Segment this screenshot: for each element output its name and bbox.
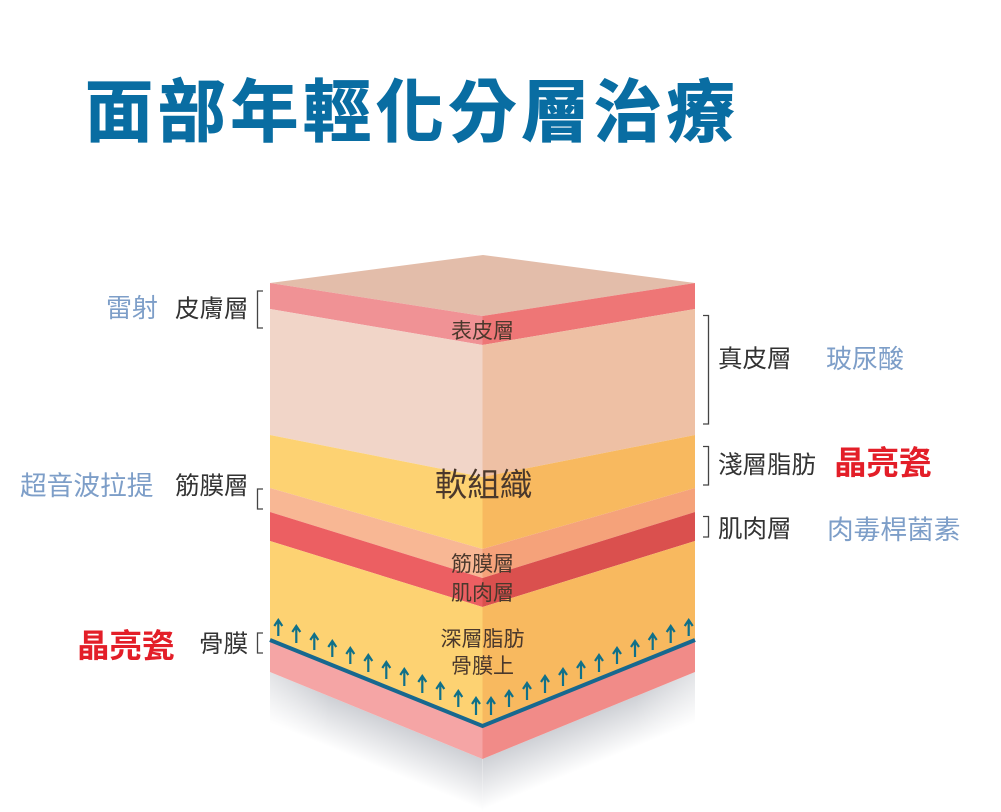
label: dermis: 真皮層 xyxy=(718,345,792,373)
muscle layer xyxy=(270,512,695,607)
left bracket: skin xyxy=(258,291,263,328)
dermis layer xyxy=(270,309,695,477)
center label: deep fat: 深層脂肪 xyxy=(440,628,524,651)
left bracket: periosteum xyxy=(258,633,263,653)
label: muscle layer: 肌肉層 xyxy=(718,515,792,543)
fascia layer xyxy=(270,488,695,578)
periosteum layer xyxy=(270,640,695,759)
layered tissue cube xyxy=(270,255,695,812)
label: ultrasound lift: 超音波拉提 xyxy=(20,471,153,501)
label: superficial fat: 淺層脂肪 xyxy=(718,451,816,479)
right bracket: dermis xyxy=(703,316,708,424)
deep fat layer xyxy=(270,541,695,727)
label: fascia layer: 筋膜層 xyxy=(175,472,248,500)
label: periosteum: 骨膜 xyxy=(199,630,248,658)
label: hyaluronic acid: 玻尿酸 xyxy=(826,344,904,374)
epidermis layer xyxy=(270,283,695,345)
top face xyxy=(270,255,695,316)
right bracket: superficial fat xyxy=(703,446,708,485)
upward arrows xyxy=(274,620,693,715)
periosteum line xyxy=(270,640,695,726)
label: botulinum toxin: 肉毒桿菌素 xyxy=(827,515,960,545)
label: skin layer: 皮膚層 xyxy=(175,295,248,323)
right bracket: muscle xyxy=(703,516,708,537)
left bracket: fascia xyxy=(258,489,263,509)
title: 面部年輕化分層治療 xyxy=(85,75,739,151)
label: crystal filler left: 晶亮瓷 xyxy=(77,628,175,664)
center label: epidermis: 表皮層 xyxy=(451,320,514,343)
center label: supraperiosteal: 骨膜上 xyxy=(451,655,514,678)
shadow under cube xyxy=(270,670,695,812)
label: crystal filler right: 晶亮瓷 xyxy=(834,445,932,481)
center label: muscle: 肌肉層 xyxy=(451,582,514,605)
center label: soft tissue: 軟組織 xyxy=(435,467,532,503)
superficial fat layer xyxy=(270,435,695,549)
label: laser: 雷射 xyxy=(106,293,158,323)
center label: fascia: 筋膜層 xyxy=(451,553,514,576)
